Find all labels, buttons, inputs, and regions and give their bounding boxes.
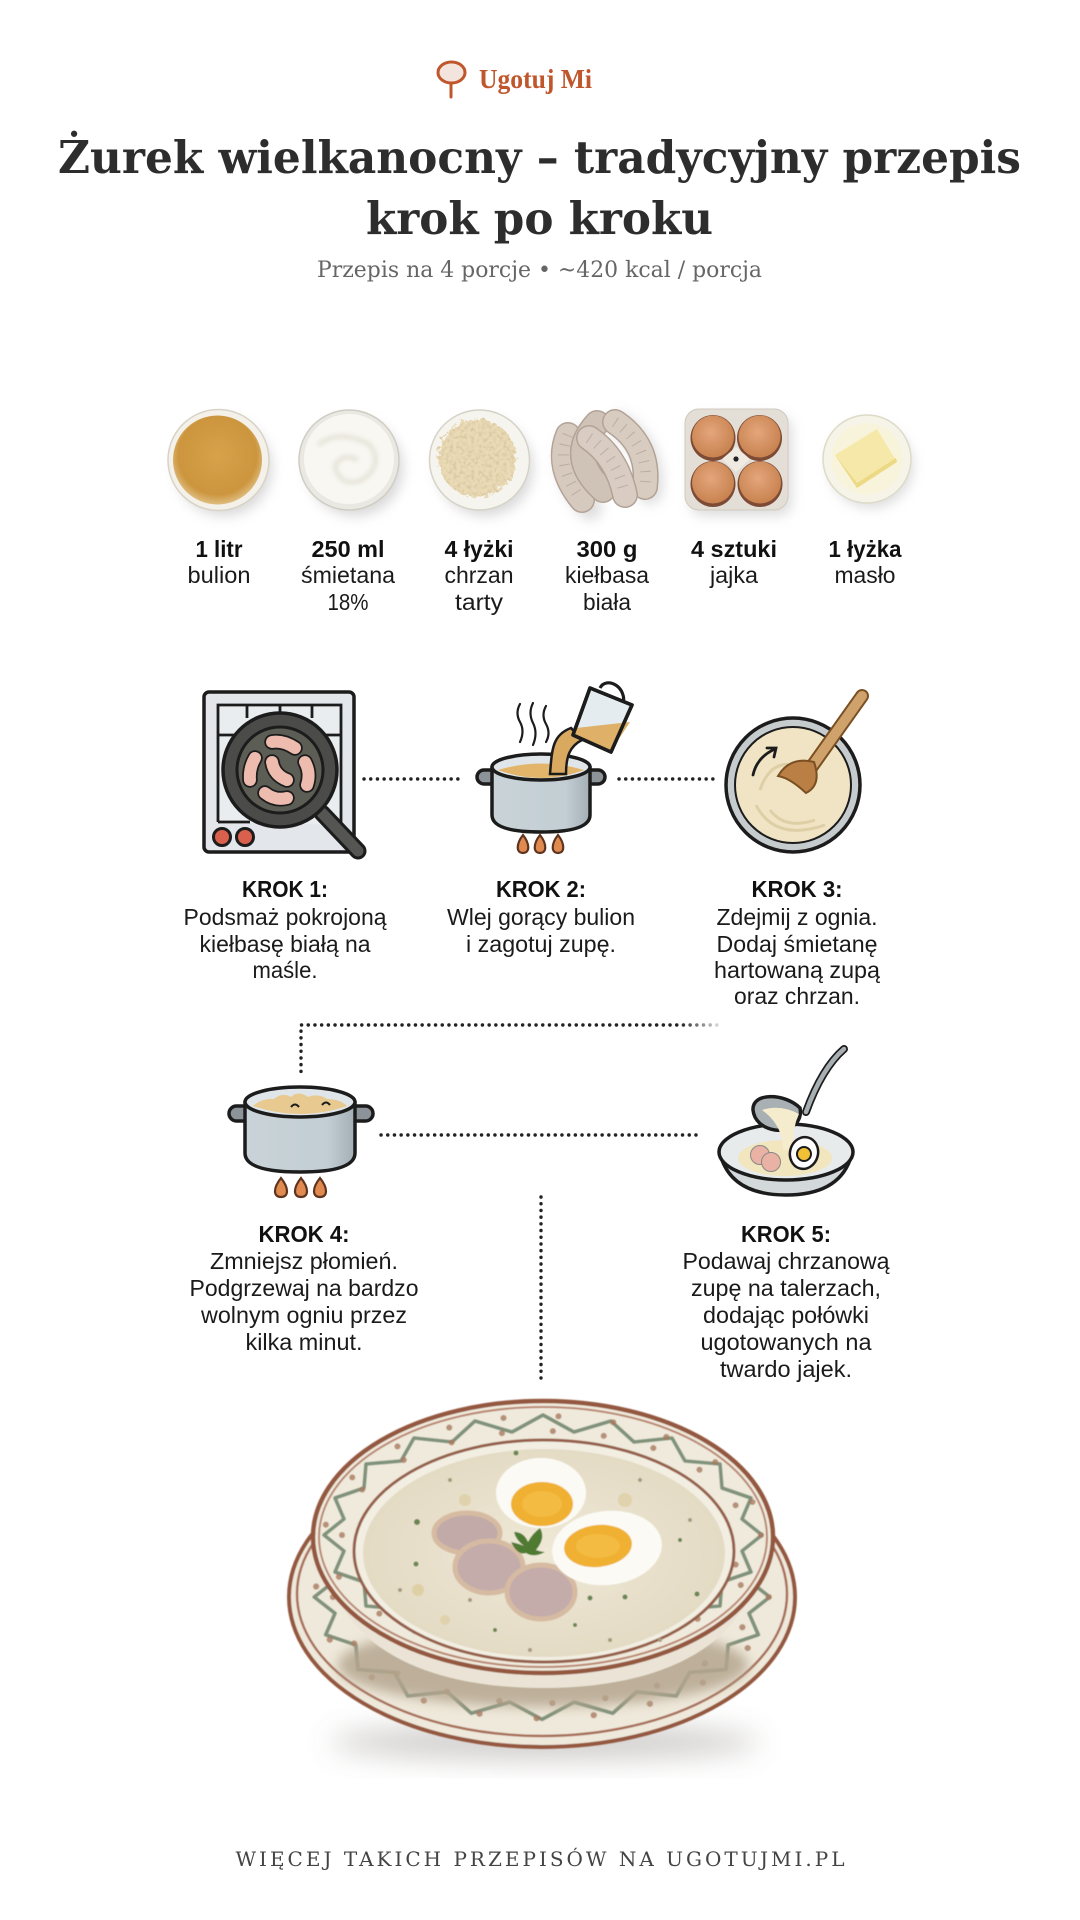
ingredient: sour cream bbox=[299, 410, 403, 615]
ingredient: broth: bulion bbox=[188, 562, 250, 588]
panel: step 1 bbox=[184, 692, 387, 983]
step 4 text: Zmniejsz płomień. bbox=[210, 1248, 398, 1274]
panel: step 5 bbox=[682, 1049, 890, 1382]
panel: step 4 bbox=[190, 1087, 418, 1355]
step 3 text: Dodaj śmietanę bbox=[716, 931, 878, 957]
ingredient: butter: 1 łyżka bbox=[828, 536, 902, 562]
step 5 text: twardo jajek. bbox=[720, 1356, 852, 1382]
lower plate bbox=[289, 1447, 795, 1747]
step 2 text: Wlej gorący bulion bbox=[447, 904, 635, 930]
icon: pouring broth into pot bbox=[477, 683, 632, 853]
ingredient: white sausage: 300 g bbox=[576, 536, 638, 562]
step 5 text bbox=[682, 1221, 890, 1382]
parsley bbox=[511, 1528, 545, 1555]
step 1 text: Podsmaż pokrojoną bbox=[184, 904, 387, 930]
ingredient: grated horseradish: tarty bbox=[455, 589, 504, 615]
arrow: step 2 to step 3 bbox=[619, 777, 718, 781]
ingredient: grated horseradish: chrzan bbox=[444, 562, 514, 588]
step 1 text: KROK 1: bbox=[242, 876, 328, 902]
step 3 text bbox=[714, 876, 880, 1009]
ingredient: white sausage: kiełbasa bbox=[565, 562, 649, 588]
step 3 text: hartowaną zupą bbox=[714, 957, 880, 983]
step 4 text: Podgrzewaj na bardzo bbox=[190, 1275, 418, 1301]
soup bowl bbox=[313, 1401, 773, 1688]
ingredient: sour cream: śmietana bbox=[301, 562, 395, 588]
icon: simmering pot bbox=[229, 1087, 373, 1197]
panel: step 3 bbox=[714, 696, 880, 1009]
icon: bowl with wooden spoon bbox=[726, 696, 862, 852]
step 2 text bbox=[447, 876, 635, 957]
ingredient: grated horseradish: 4 łyżki bbox=[444, 536, 514, 562]
ingredient: white sausage bbox=[564, 422, 651, 615]
ingredient: butter: masło bbox=[834, 562, 896, 588]
boiled egg halves bbox=[496, 1458, 666, 1591]
title bbox=[58, 130, 1021, 245]
step 1 text: maśle. bbox=[252, 957, 318, 983]
step 5 text: Podawaj chrzanową bbox=[682, 1248, 890, 1274]
step 3 text: Zdejmij z ognia. bbox=[716, 904, 878, 930]
step 5 text: zupę na talerzach, bbox=[691, 1275, 881, 1301]
logo: Ugotuj Mi bbox=[438, 62, 592, 97]
ingredient: broth bbox=[168, 410, 272, 588]
step 1 text bbox=[184, 876, 387, 983]
panel: ingredients bbox=[168, 409, 913, 615]
ingredient: sour cream: 18% bbox=[328, 589, 368, 615]
step 4 text: KROK 4: bbox=[258, 1221, 350, 1247]
step 1 text: kiełbasę białą na bbox=[200, 931, 371, 957]
step 3 text: KROK 3: bbox=[752, 876, 842, 902]
arrow: step 5 to finished dish bbox=[539, 1197, 543, 1382]
title: krok po kroku bbox=[366, 192, 713, 245]
arrow: step 1 to step 2 bbox=[364, 777, 463, 781]
title: Żurek wielkanocny – tradycyjny przepis bbox=[58, 130, 1021, 184]
illustration: finished żurek in decorated bowl bbox=[289, 1401, 795, 1760]
ingredient: sour cream: 250 ml bbox=[312, 536, 384, 562]
footer: WIĘCEJ TAKICH PRZEPISÓW NA UGOTUJMI.PL bbox=[236, 1846, 844, 1871]
ingredient: butter bbox=[823, 415, 913, 588]
step 2 text: i zagotuj zupę. bbox=[466, 931, 616, 957]
step 5 text: KROK 5: bbox=[741, 1221, 831, 1247]
arrow: step 3 to step 4 bbox=[301, 1025, 717, 1072]
step 4 text bbox=[190, 1221, 418, 1355]
icon: ladle over soup plate bbox=[719, 1049, 853, 1195]
ingredient: eggs in carton: jajka bbox=[709, 562, 758, 588]
step 5 text: ugotowanych na bbox=[700, 1329, 872, 1355]
sausage slices bbox=[434, 1513, 575, 1619]
step 4 text: kilka minut. bbox=[246, 1329, 362, 1355]
icon: frying pan on stove bbox=[204, 692, 358, 852]
step 4 text: wolnym ogniu przez bbox=[200, 1302, 407, 1328]
step 5 text: dodając połówki bbox=[703, 1302, 869, 1328]
step 3 text: oraz chrzan. bbox=[734, 983, 860, 1009]
step 2 text: KROK 2: bbox=[496, 876, 586, 902]
ingredient: white sausage: biała bbox=[583, 589, 631, 615]
ingredient: eggs in carton: 4 sztuki bbox=[691, 536, 777, 562]
logo: Ugotuj Mi: Ugotuj Mi bbox=[479, 64, 592, 94]
ingredient: eggs in carton bbox=[685, 409, 792, 588]
ingredient: grated horseradish bbox=[430, 410, 533, 615]
subtitle: Przepis na 4 porcje • ~420 kcal / porcja bbox=[317, 258, 762, 283]
arrow: step 4 to step 5 bbox=[381, 1133, 696, 1137]
panel: step 2 bbox=[447, 683, 635, 957]
ingredient: broth: 1 litr bbox=[196, 536, 243, 562]
